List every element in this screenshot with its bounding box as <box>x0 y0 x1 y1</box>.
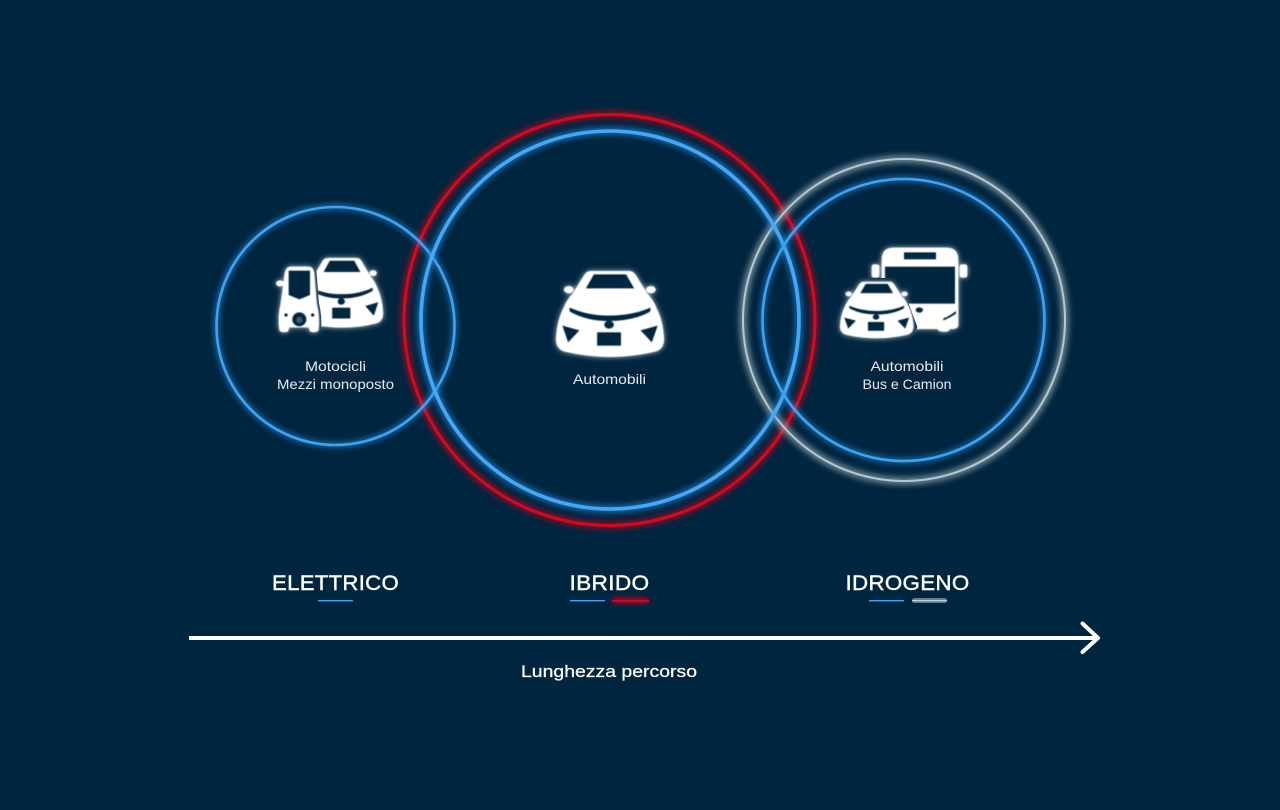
ring: hybrid blue <box>421 131 799 509</box>
icon: front car <box>840 282 913 338</box>
legend: electric <box>318 600 353 601</box>
axis label: Lunghezza percorso <box>521 663 697 681</box>
label: hydrogen vehicles <box>862 358 952 392</box>
ring: hydrogen blue <box>762 179 1044 461</box>
heading: hybrid: IBRIDO <box>570 571 650 595</box>
legend: hydrogen <box>869 598 947 603</box>
arrow: range axis <box>189 624 1098 652</box>
ring: hydrogen grey <box>743 159 1065 481</box>
car details <box>562 274 658 346</box>
label: hydrogen vehicles: Bus e Camion <box>862 376 952 392</box>
icon: car and single-seater <box>276 258 383 332</box>
single-seater outline gap <box>279 267 319 332</box>
ring: electric blue <box>216 207 454 445</box>
legend: hybrid <box>570 597 649 604</box>
label: electric vehicles <box>277 358 394 392</box>
label: hydrogen vehicles: Automobili <box>870 358 944 374</box>
heading: hydrogen: IDROGENO <box>846 571 970 595</box>
label: hybrid vehicles: Automobili <box>573 371 646 387</box>
single-seater details <box>284 271 314 326</box>
icon: bus <box>872 248 967 332</box>
icon: single-seater vehicle <box>276 267 319 332</box>
car details <box>311 261 378 318</box>
car outline gap <box>840 282 913 338</box>
car details <box>844 284 909 331</box>
icon: front car <box>301 258 383 328</box>
icon: bus and car <box>840 248 967 338</box>
ring: hybrid red <box>404 114 815 526</box>
bus details <box>885 252 956 320</box>
heading: electric: ELETTRICO <box>272 571 399 595</box>
car silhouette <box>556 271 664 357</box>
icon: car <box>556 271 664 357</box>
label: electric vehicles: Motocicli <box>305 358 366 374</box>
label: electric vehicles: Mezzi monoposto <box>277 376 394 392</box>
